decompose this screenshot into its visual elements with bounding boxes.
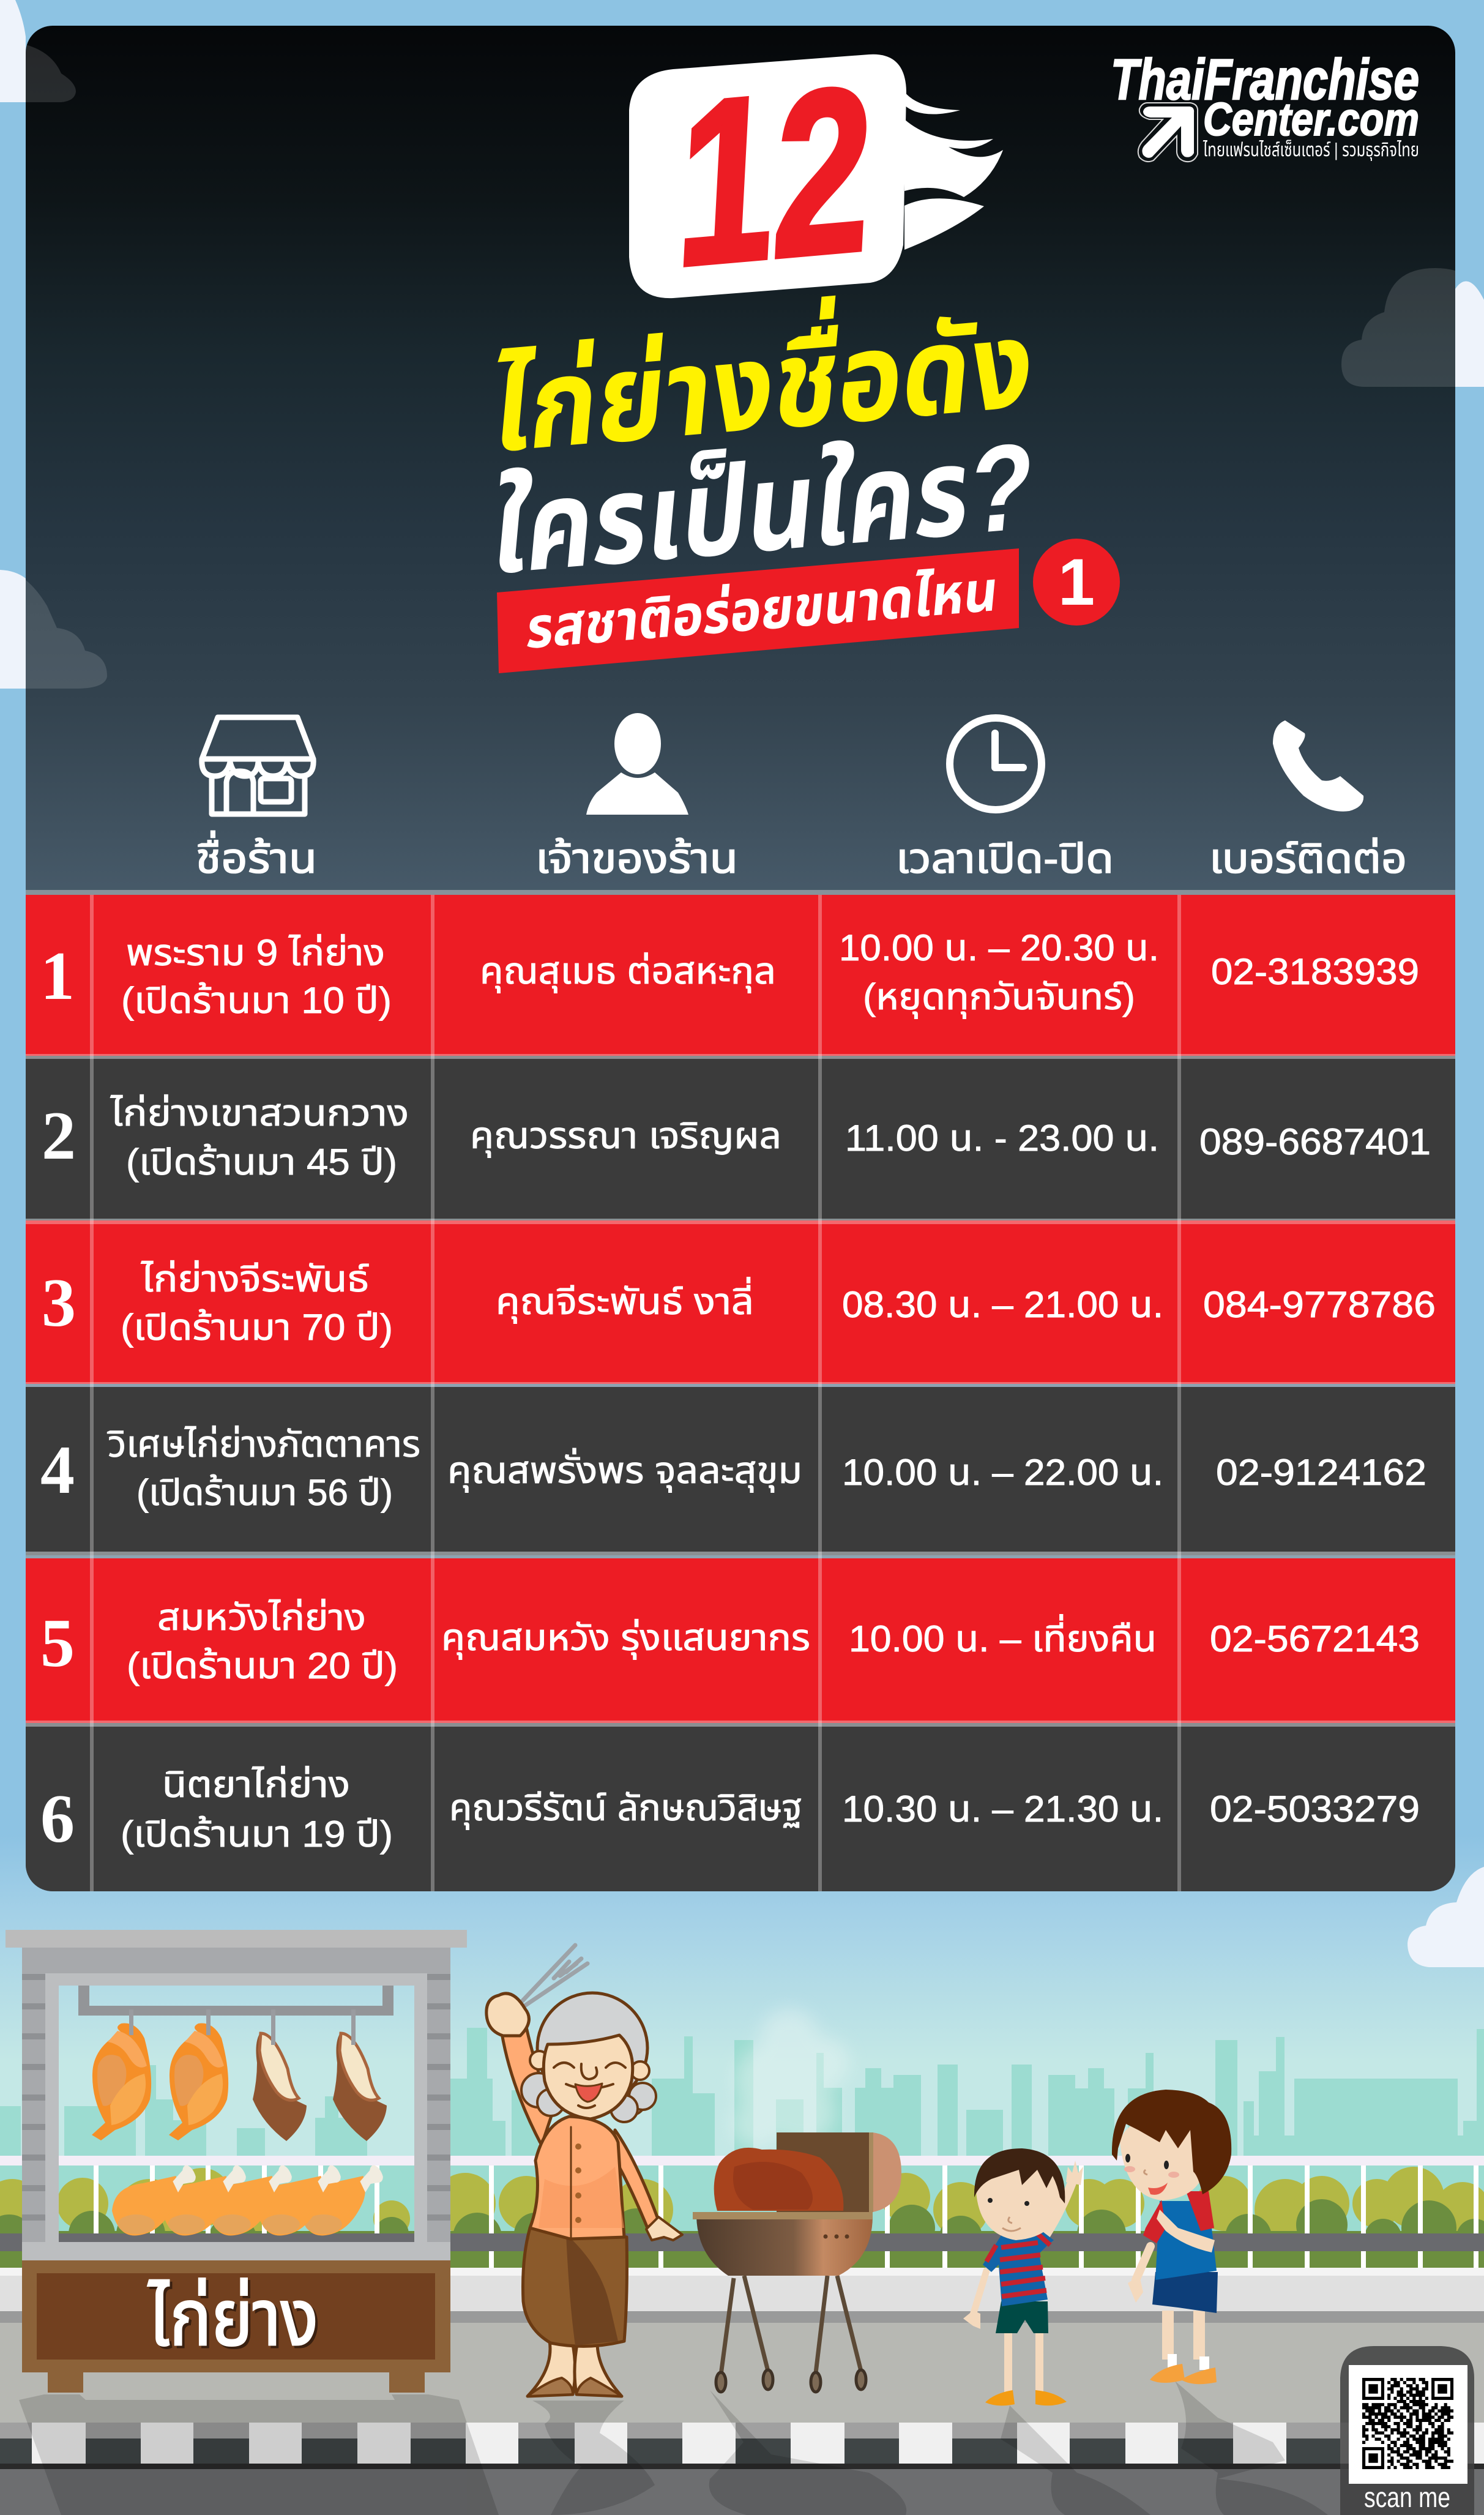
shoes: [1150, 2364, 1217, 2384]
open mouth: [575, 2083, 602, 2102]
icon: storefront: [202, 717, 313, 814]
ear: [1199, 2165, 1218, 2183]
row 5: 02-5672143: [1210, 1618, 1420, 1659]
grandmother vendor: [487, 1945, 682, 2396]
row 6: คุณวรีรัตน์ ลักษณวิสิษฐ: [449, 1787, 802, 1830]
logo: [1111, 47, 1419, 162]
striped shirt: [983, 2228, 1054, 2306]
row 1: (เปิดร้านมา 10 ปี): [121, 980, 392, 1021]
row 2: คุณวรรณา เจริญผล: [470, 1115, 781, 1158]
legs: [1004, 2332, 1043, 2392]
number card: [629, 36, 906, 315]
row 2: 2: [42, 1098, 76, 1174]
row 1: [26, 895, 1455, 1054]
row 4: วิเศษไก่ย่างภัตตาคาร: [107, 1424, 420, 1465]
row 3: 084-9778786: [1203, 1284, 1436, 1325]
curb stripes: [32, 2423, 1484, 2464]
barbecue grill with roast chicken: [693, 2132, 901, 2392]
cloud: top-left: [0, 0, 26, 102]
row 1: พระราม 9 ไก่ย่าง: [126, 932, 385, 973]
shorts: [1152, 2272, 1218, 2313]
sidewalk and curb: [0, 2268, 1484, 2515]
counter: [22, 2242, 450, 2393]
row 4: คุณสพรั่งพร จุลละสุขุม: [447, 1448, 802, 1493]
skirt: [523, 2228, 627, 2346]
cloud: bottom-right: [1408, 1867, 1484, 1967]
row 3: [26, 1224, 1455, 1382]
column header: shop: [196, 717, 317, 882]
title line 1: ไก่ย่างชื่อดัง: [487, 278, 1041, 478]
episode number badge: 1: [1058, 545, 1095, 619]
row 3: 3: [42, 1265, 76, 1341]
scan me label: scan me: [1364, 2481, 1450, 2513]
sign text: ไก่ย่าง: [147, 2274, 318, 2362]
roast chicken: [714, 2148, 843, 2211]
QR code badge: [1340, 2346, 1474, 2515]
row 2: [26, 1059, 1455, 1219]
raised arm: [1046, 2182, 1072, 2234]
main dark panel: [0, 26, 1484, 1891]
hanging sliced meat: [253, 2009, 387, 2141]
grill wheels: [716, 2370, 866, 2392]
row 3: ไก่ย่างจีระพันธ์: [141, 1258, 369, 1299]
table: [26, 890, 1455, 1891]
episode number badge: [1033, 539, 1120, 626]
row 4: 4: [40, 1432, 75, 1508]
older boy in blue shirt: [1112, 2090, 1231, 2384]
face details: [1124, 2154, 1179, 2195]
lowered arm: [973, 2271, 986, 2315]
label: ชื่อร้าน: [196, 831, 317, 882]
logo: Center.com: [1203, 94, 1419, 146]
cloud: right of panel: [1455, 282, 1484, 387]
fist: [487, 1994, 529, 2036]
barrel: [696, 2217, 873, 2276]
row 5: คุณสมหวัง รุ่งแสนยากร: [441, 1617, 810, 1660]
shoes: [985, 2390, 1067, 2405]
red subtitle ribbon: [497, 548, 1019, 673]
icon: telephone: [1273, 720, 1363, 812]
hand: [1128, 2276, 1143, 2303]
row 6: (เปิดร้านมา 19 ปี): [121, 1814, 393, 1855]
legs: [528, 2341, 622, 2396]
number 12: 12: [672, 36, 878, 315]
row 1: 1: [40, 938, 75, 1014]
row 3: 08.30 น. – 21.00 น.: [842, 1284, 1163, 1325]
railing and hedge: [0, 2156, 1484, 2270]
drumsticks on tray: [112, 2166, 383, 2235]
shoes: [528, 2378, 622, 2396]
socks: [1168, 2354, 1209, 2370]
small boy waving: [963, 2148, 1083, 2405]
column header: owner: [535, 713, 738, 882]
row 1: คุณสุเมธ ต่อสหะกุล: [480, 951, 776, 993]
legs: [1162, 2311, 1205, 2360]
waving hand: [1066, 2161, 1083, 2185]
cloud: mid-left: [0, 570, 26, 689]
row 4: 02-9124162: [1216, 1452, 1426, 1493]
hair buns: [521, 2073, 656, 2122]
stall roof: [6, 1930, 467, 1948]
column header: phone: [1209, 720, 1407, 882]
ground shadows: [19, 2381, 1328, 2515]
head: [1120, 2118, 1207, 2200]
railing posts: [94, 2166, 1478, 2268]
row 2: 089-6687401: [1199, 1121, 1431, 1162]
skyline: [0, 2028, 1484, 2161]
subtitle text: รสชาติอร่อยขนาดไหน: [524, 559, 1001, 660]
hedge: green bushes: [0, 2199, 1484, 2269]
face: [543, 2035, 633, 2119]
row 6: 02-5033279: [1210, 1788, 1420, 1829]
panel: faint clouds: [0, 45, 1484, 689]
flame behind number card: [904, 92, 1003, 250]
open lid: [777, 2132, 873, 2212]
roast chicken stall: [6, 1930, 467, 2393]
raised arm: [502, 2027, 554, 2145]
grill legs: [721, 2276, 861, 2375]
row 2: ไก่ย่างเขาสวนกวาง: [110, 1093, 409, 1134]
logo: ไทยแฟรนไชส์เซ็นเตอร์ | รวมธุรกิจไทย: [1202, 139, 1419, 161]
hanging chickens: [92, 2009, 228, 2140]
row 6: 6: [40, 1781, 75, 1857]
row 5: สมหวังไก่ย่าง: [157, 1597, 366, 1638]
row 5: [26, 1558, 1455, 1721]
row 6: [26, 1727, 1455, 1891]
row 1: (หยุดทุกวันจันทร์): [863, 976, 1135, 1019]
face details: [988, 2198, 1029, 2231]
shorts: [996, 2301, 1048, 2333]
red sleeves: [1143, 2191, 1214, 2243]
blouse: [530, 2117, 624, 2239]
hedge: olive bushes: [0, 2167, 1484, 2246]
row 5: 5: [40, 1605, 75, 1681]
row 3: (เปิดร้านมา 70 ปี): [121, 1307, 393, 1348]
lowered arm: [1136, 2246, 1150, 2280]
row 1: 02-3183939: [1211, 951, 1419, 992]
smoke from the grill: [731, 2009, 849, 2148]
icon: person: [586, 713, 688, 815]
row 3: คุณจีระพันธ์ งาลี่: [496, 1277, 754, 1324]
row 1: 10.00 น. – 20.30 น.: [839, 927, 1159, 968]
label: เบอร์ติดต่อ: [1209, 835, 1407, 882]
head: [976, 2156, 1062, 2240]
row 5: 10.00 น. – เที่ยงคืน: [849, 1614, 1157, 1659]
row 6: 10.30 น. – 21.30 น.: [842, 1788, 1163, 1829]
row 2: 11.00 น. - 23.00 น.: [845, 1118, 1159, 1159]
ears: [530, 2051, 649, 2080]
row 4: 10.00 น. – 22.00 น.: [842, 1452, 1163, 1493]
row 6: นิตยาไก่ย่าง: [162, 1764, 350, 1805]
title line 2: ใครเป็นใคร?: [487, 416, 1040, 600]
label: เวลาเปิด-ปิด: [896, 835, 1114, 882]
label: เจ้าของร้าน: [535, 835, 738, 882]
row 4: (เปิดร้านมา 56 ปี): [136, 1472, 393, 1513]
blue shirt: [1155, 2201, 1217, 2280]
hand: [963, 2311, 980, 2329]
hand on chest: [1157, 2210, 1215, 2252]
sign text: ไก่ย่าง: [150, 2277, 321, 2364]
hair: [1112, 2090, 1231, 2194]
tongs: [519, 1945, 587, 2009]
logo arrow: [1138, 103, 1198, 162]
hanging rack: [78, 1986, 393, 2016]
hair: [537, 1993, 647, 2103]
row 4: [26, 1387, 1455, 1552]
facial features: [554, 2063, 625, 2108]
icon: clock: [950, 718, 1042, 810]
hair: [974, 2148, 1065, 2203]
stall frame: [22, 1948, 450, 2243]
QR code: [1362, 2380, 1453, 2467]
row 5: (เปิดร้านมา 20 ปี): [127, 1645, 398, 1686]
column header: hours: [896, 718, 1114, 882]
right arm and hand: [612, 2130, 658, 2228]
row 2: (เปิดร้านมา 45 ปี): [126, 1142, 397, 1183]
